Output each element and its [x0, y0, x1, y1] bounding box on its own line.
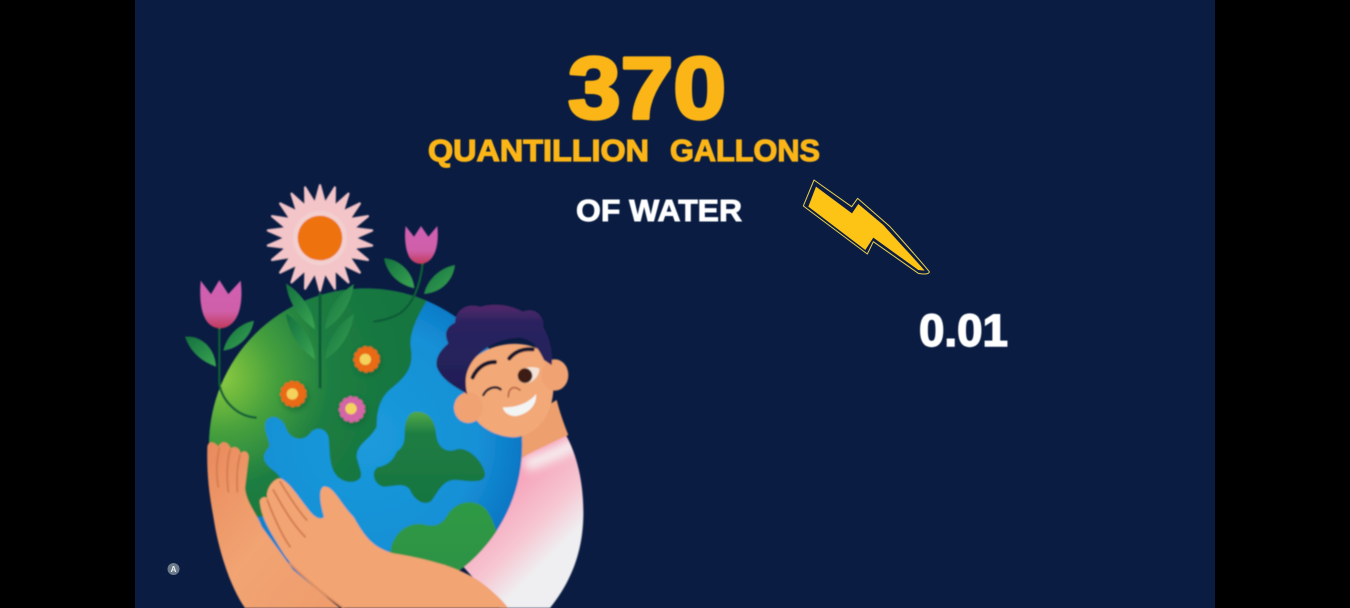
icon: lightning bolt	[803, 180, 929, 274]
winking eye	[483, 387, 501, 395]
heading: quantillion gallons: QUANTILLION	[428, 133, 649, 168]
arm and back hand	[207, 442, 340, 608]
nose	[508, 388, 520, 397]
hair	[436, 305, 552, 394]
right tulip	[373, 226, 455, 322]
heading: quantillion gallons: GALLONS	[670, 133, 820, 168]
text: of water: OF WATER	[576, 193, 742, 228]
badge: A watermark	[168, 563, 180, 575]
head	[436, 305, 568, 437]
continent: main	[200, 270, 428, 517]
smile	[503, 394, 536, 416]
illustration: person hugging the globe	[185, 185, 583, 608]
finger creases	[217, 448, 343, 608]
heading: quantillion gallons	[428, 133, 820, 168]
continent: south	[390, 501, 497, 572]
number: 0.01: 0.01	[919, 305, 1008, 356]
ears	[542, 359, 568, 391]
shirt and body	[463, 433, 583, 608]
daisy flower with stem	[267, 185, 373, 388]
slide background	[135, 0, 1215, 608]
continent: centre island	[374, 412, 485, 503]
front hand and forearm	[260, 478, 508, 608]
neck	[518, 400, 568, 463]
open eye	[517, 367, 539, 383]
globe	[208, 288, 524, 596]
globe flowers	[281, 347, 382, 426]
left tulip	[185, 280, 257, 418]
eyebrows	[473, 362, 495, 377]
badge: A watermark: A	[171, 565, 177, 574]
heading: 370: 370	[568, 40, 726, 137]
